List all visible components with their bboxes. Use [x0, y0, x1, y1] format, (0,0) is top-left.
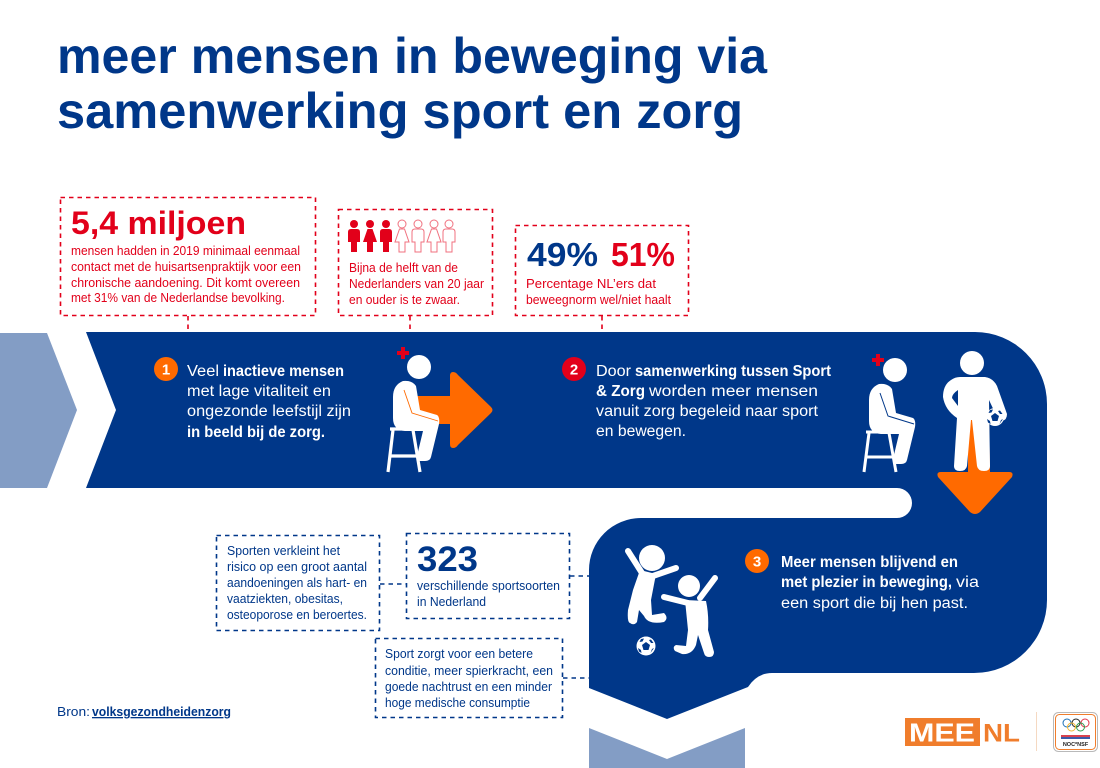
step 2	[562, 357, 831, 440]
step 3: via	[956, 574, 979, 591]
callout: conditie: hoge medische consumptie	[385, 696, 530, 710]
callout: conditie: goede nachtrust en een minder	[385, 680, 552, 694]
icon: standing person with ball and orange down arrow	[937, 351, 1013, 514]
callout: 323 sportsoorten: in Nederland	[417, 595, 486, 609]
callout: gezondheid: aandoeningen als hart- en	[227, 576, 367, 590]
callout: conditie: Sport zorgt voor een betere	[385, 647, 533, 661]
callout: 5,4 miljoen: chronische aandoening. Dit komt overeen	[71, 276, 300, 290]
callout: beweegnorm: beweegnorm wel/niet haalt	[526, 293, 672, 307]
callout: gezondheid: risico op een groot aantal	[227, 560, 367, 574]
callout: conditie	[376, 638, 589, 718]
step 3: met plezier in beweging,	[781, 574, 952, 591]
callout: beweegnorm: 49%	[527, 236, 598, 273]
callout: overgewicht: en ouder is te zwaar.	[349, 293, 460, 307]
source: Bron:	[57, 704, 90, 719]
callout: 5,4 miljoen: 5,4 miljoen	[71, 205, 246, 241]
step 2: Door	[596, 363, 631, 380]
step 3	[745, 549, 979, 612]
person A	[628, 545, 676, 624]
logo: NOC NSF	[1054, 712, 1098, 752]
step 1: ongezonde leefstijl zijn	[187, 403, 351, 420]
icon: ball	[986, 408, 1004, 426]
callout: 5,4 miljoen: met 31% van de Nederlandse bevolking.	[71, 291, 285, 305]
callout: 323 sportsoorten	[406, 534, 589, 618]
logo: NOC NSF: NOC*NSF	[1063, 742, 1089, 748]
callout: overgewicht: Bijna de helft van de	[349, 261, 458, 275]
step 2: worden meer mensen	[648, 383, 818, 400]
step 1: Veel	[187, 363, 219, 380]
callout: gezondheid	[216, 536, 406, 630]
ball	[636, 636, 656, 656]
callout: overgewicht	[338, 210, 492, 332]
source: volksgezondheidenzorg	[92, 704, 231, 719]
callout: 323 sportsoorten: verschillende sportsoorten	[417, 579, 560, 593]
step 2: & Zorg	[596, 383, 645, 400]
callout: 5,4 miljoen	[60, 198, 316, 332]
step 3: een sport die bij hen past.	[781, 595, 968, 612]
callout: beweegnorm: Percentage NL’ers dat	[526, 277, 657, 291]
step 2: samenwerking tussen Sport	[635, 363, 831, 380]
icon: two jumping people and ball	[628, 545, 715, 657]
step 1: inactieve mensen	[223, 363, 344, 380]
light blue arrow: end	[589, 728, 745, 768]
step 3: Meer mensen blijvend en	[781, 554, 958, 571]
step 3: 3	[753, 554, 761, 570]
title	[57, 28, 768, 139]
title: samenwerking sport en zorg	[57, 83, 743, 139]
light blue arrow: start	[0, 333, 77, 488]
callout: conditie: conditie, meer spierkracht, een	[385, 664, 553, 678]
callout: gezondheid: vaatziekten, obesitas,	[227, 592, 343, 606]
logo: MEE NL: NL	[983, 720, 1020, 748]
logo: MEE NL: MEE	[909, 718, 975, 748]
callout: 323 sportsoorten: 323	[417, 540, 478, 579]
icon: seated person with orange arrow	[388, 347, 492, 472]
callout: gezondheid: osteoporose en beroertes.	[227, 608, 367, 622]
step 2: 2	[570, 362, 578, 378]
callout: 5,4 miljoen: contact met de huisartsenpraktijk voor een	[71, 260, 301, 274]
person B	[664, 575, 715, 657]
step 2: vanuit zorg begeleid naar sport	[596, 403, 819, 420]
callout: 5,4 miljoen: mensen hadden in 2019 minimaal eenmaal	[71, 244, 300, 258]
title: meer mensen in beweging via	[57, 28, 768, 84]
step 1: met lage vitaliteit en	[187, 383, 331, 400]
callout: beweegnorm: 51%	[611, 236, 675, 273]
icon: seated person	[864, 354, 915, 472]
icon: seven people, three filled	[348, 220, 455, 252]
step 1: 1	[162, 362, 170, 378]
main blue flow band	[86, 332, 1047, 719]
callout: gezondheid: Sporten verkleint het	[227, 544, 341, 558]
callout: beweegnorm	[516, 226, 688, 332]
step 1	[154, 357, 351, 441]
step 2: en bewegen.	[596, 423, 686, 440]
logo: MEE NL	[905, 718, 1020, 748]
callout: overgewicht: Nederlanders van 20 jaar	[349, 277, 484, 291]
step 1: in beeld bij de zorg.	[187, 424, 325, 441]
